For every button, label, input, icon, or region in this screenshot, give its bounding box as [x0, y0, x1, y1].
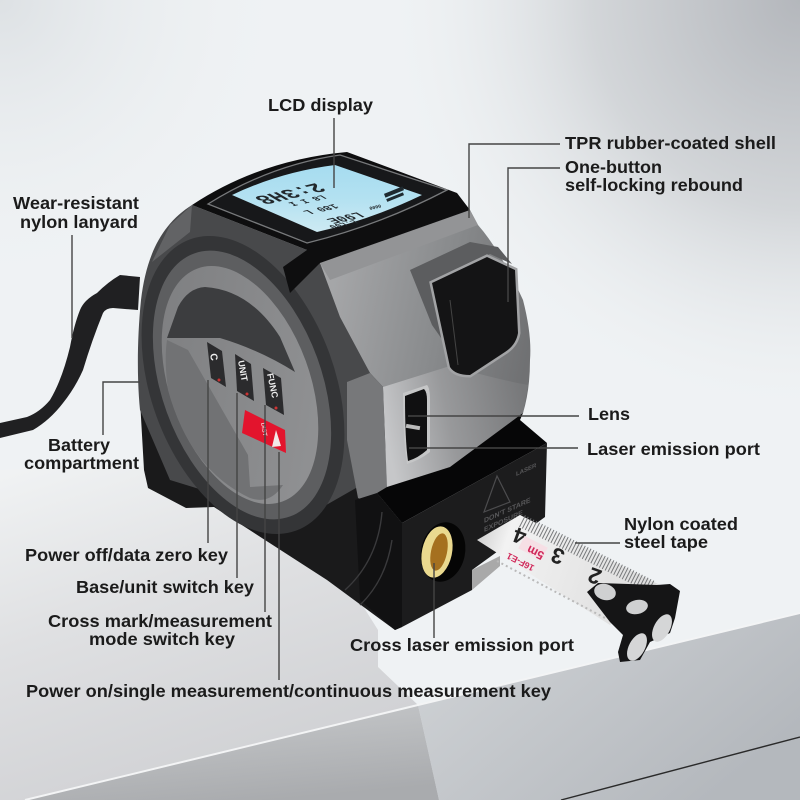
LCD bezel [208, 155, 447, 243]
grey right body [320, 210, 530, 487]
LCD display screen: L.L00 [326, 218, 360, 229]
label: laser emission port: Laser emission port [587, 439, 760, 459]
tape markings: 2 [585, 562, 605, 590]
tape markings: 5m [525, 542, 546, 563]
label: one-button self-locking rebound [565, 157, 743, 195]
brass cross laser port [415, 518, 471, 586]
tape measure body [104, 152, 547, 630]
laser warning mark [484, 476, 510, 512]
button housing [410, 242, 512, 345]
black rubber base of the housing [140, 300, 402, 630]
leader lines [72, 118, 620, 680]
label: wear-resistant nylon lanyard: Wear-resistant [13, 193, 139, 213]
label: one-button self-locking rebound: One-button [565, 157, 662, 177]
tape markings [505, 522, 605, 590]
tape markings: 4 [509, 522, 530, 550]
key: UNIT: UNIT [236, 360, 250, 383]
mid grey wedge [347, 373, 387, 505]
black base block [345, 413, 547, 630]
label: one-button self-locking rebound: self-locking rebound [565, 175, 743, 195]
key: UNIT [235, 354, 254, 401]
key: red measure button [242, 410, 286, 453]
front disc middle ring [119, 226, 365, 544]
key: FUNC [263, 368, 284, 415]
dark grey shell [138, 205, 387, 520]
key: red measure button: DIST [259, 422, 267, 437]
label: wear-resistant nylon lanyard: nylon lanyard [20, 212, 138, 232]
shell highlight [152, 205, 192, 262]
label: battery compartment [24, 435, 139, 473]
LCD display screen: L90E [321, 209, 367, 224]
label: battery compartment: compartment [24, 453, 139, 473]
front disc outer rim [104, 208, 382, 562]
label: LCD display: LCD display [268, 95, 373, 115]
label: cross mark/measurement mode switch key: mode switch key [89, 629, 235, 649]
disc left panel [166, 340, 283, 500]
label: nylon coated steel tape: steel tape [624, 532, 708, 552]
label: base/unit switch key: Base/unit switch key [76, 577, 254, 597]
label: TPR rubber-coated shell: TPR rubber-coated shell [565, 133, 776, 153]
LCD display screen: 2:3H8 [247, 179, 332, 207]
top strip highlight [320, 210, 478, 280]
label: battery compartment: Battery [48, 435, 110, 455]
LCD top black housing [192, 152, 470, 293]
label: wear-resistant nylon lanyard [13, 193, 139, 232]
tape markings: 16F-E1 [505, 551, 536, 573]
LCD display screen: 180 L [299, 202, 341, 215]
key: C: C [207, 353, 219, 362]
label: power on/single measurement/continuous measurement key: Power on/single measurement/continuous measurement key [26, 681, 551, 701]
black base block: EXPOSURE [484, 508, 523, 534]
label: nylon coated steel tape [624, 514, 738, 552]
lens window [403, 385, 430, 464]
LCD display screen [232, 165, 422, 232]
tape end hook [587, 581, 680, 664]
label: cross mark/measurement mode switch key: Cross mark/measurement [48, 611, 272, 631]
black base block: DON'T STARE [484, 495, 531, 525]
lighter lower band [383, 366, 528, 487]
label: lens: Lens [588, 404, 630, 424]
key: C [207, 342, 226, 387]
label: cross laser emission port: Cross laser emission port [350, 635, 574, 655]
button rim [432, 257, 518, 375]
LCD display screen: L8 I I [285, 193, 329, 207]
label: cross mark/measurement mode switch key [48, 611, 272, 649]
tape markings: 3 [548, 542, 568, 570]
steel tape [472, 515, 660, 625]
label: power off/data zero key: Power off/data zero key [25, 545, 228, 565]
self-locking button [432, 257, 518, 375]
black base block: LASER [516, 462, 537, 478]
icon: nylon lanyard strap [0, 275, 140, 438]
label: nylon coated steel tape: Nylon coated [624, 514, 738, 534]
dark semicircle panel [167, 287, 295, 372]
key: FUNC: FUNC [265, 372, 280, 399]
front disc face [132, 245, 348, 525]
LCD display screen: 0000 [369, 204, 382, 212]
